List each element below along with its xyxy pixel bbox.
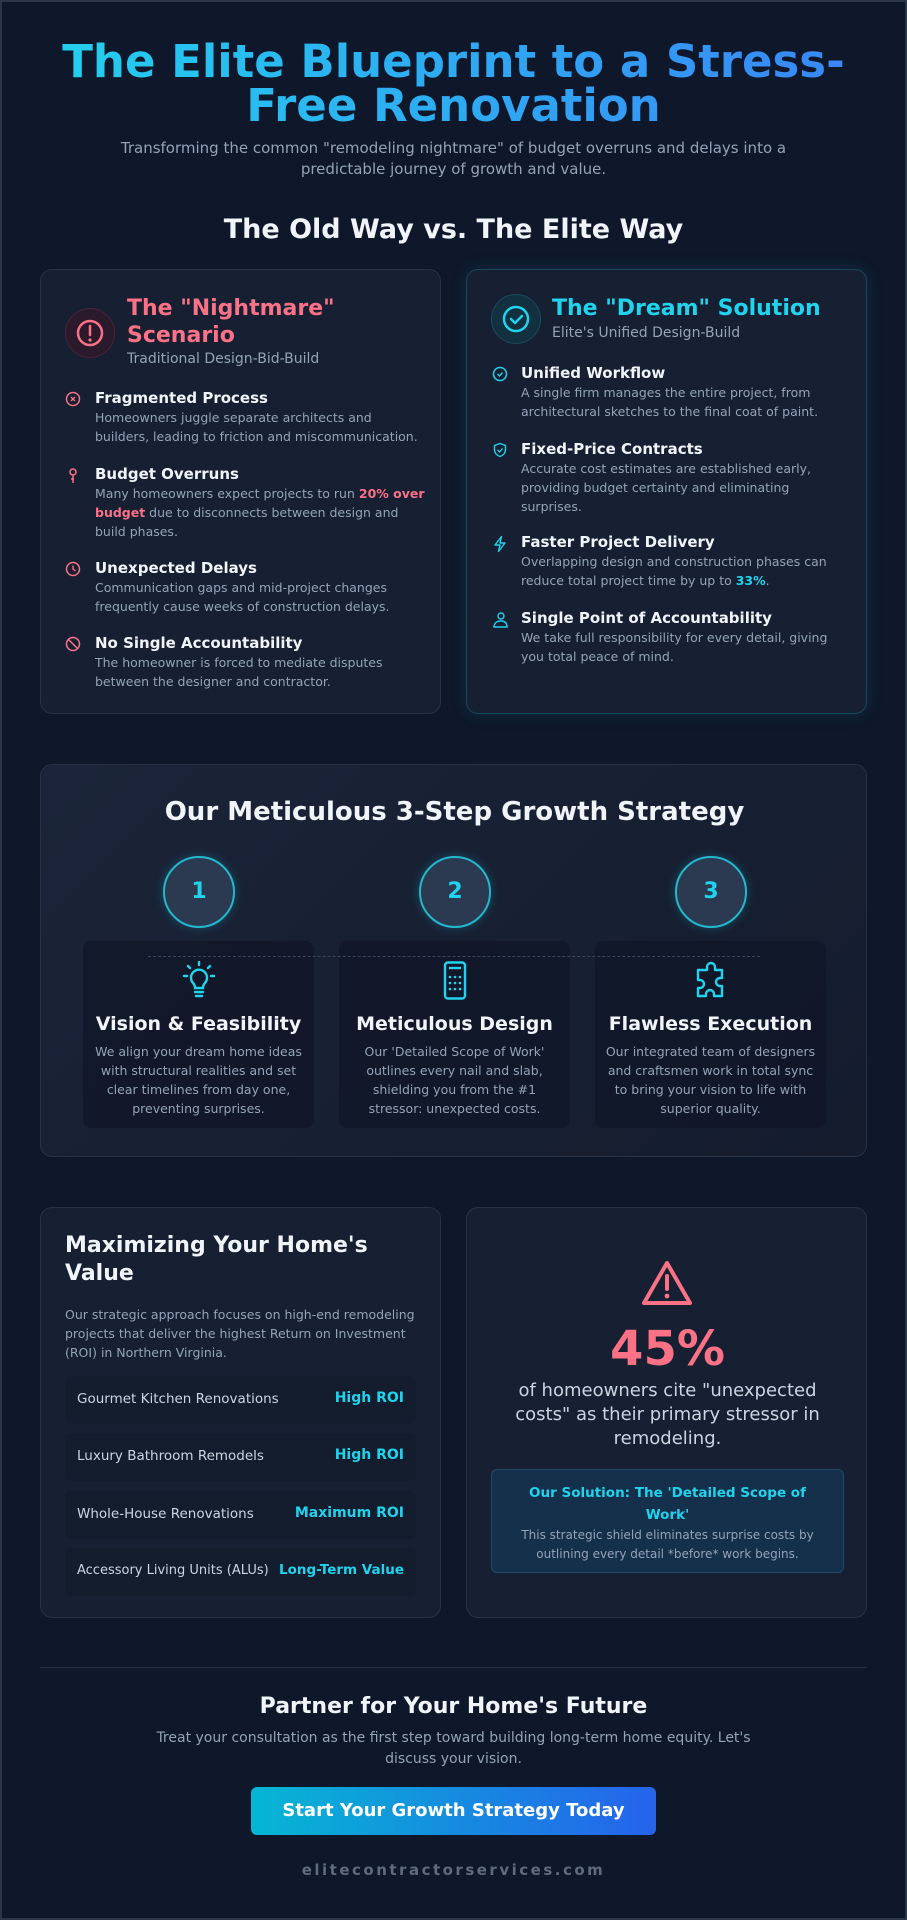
roi row: bathroom: Luxury Bathroom Remodels: [77, 1448, 264, 1464]
panel: dream: Fixed-Price Contracts: [521, 440, 703, 458]
callout: solution: This strategic shield eliminates surprise costs by outlining every detail *before* work begins.: [521, 1528, 814, 1561]
item: faster: [494, 533, 827, 588]
item: unified: [492, 364, 818, 419]
button: CTA: Start Your Growth Strategy Today: [282, 1800, 625, 1821]
heading: Value: [65, 1261, 134, 1286]
panel: nightmare: No Single Accountability: [95, 634, 302, 652]
heading: [127, 296, 335, 348]
paragraph: partner: Treat your consultation as the first step toward building long-term home equity. Let's discuss your vision.: [156, 1730, 751, 1767]
panel: nightmare: [40, 269, 441, 714]
panel: nightmare: Unexpected Delays: [95, 559, 257, 577]
panel: nightmare: Communication gaps and mid-project changes frequently cause weeks of construction delays.: [95, 580, 390, 614]
step 1: [83, 852, 314, 1128]
panel: 3-step strategy: [40, 764, 867, 1157]
heading: Maximizing Your Home's: [65, 1233, 368, 1258]
panel: nightmare: Fragmented Process: [95, 389, 268, 407]
title: Free Renovation: [246, 79, 661, 132]
icon: lightbulb: [182, 961, 216, 998]
roi row: whole house: Maximum ROI: [295, 1505, 404, 1521]
roi row: ALUs: Long-Term Value: [279, 1562, 404, 1578]
stat number: 45%: [610, 1321, 725, 1377]
subheading: Traditional Design-Bid-Build: [127, 351, 319, 367]
panel: nightmare: The homeowner is forced to mediate disputes between the designer and contractor.: [95, 655, 382, 689]
panel: dream: Single Point of Accountability: [521, 609, 772, 627]
icon: alert circle: [65, 308, 115, 358]
subtitle: Transforming the common "remodeling nightmare" of budget overruns and delays into a predictable journey of growth and value.: [121, 139, 786, 178]
step card: [83, 941, 314, 1128]
subheading: Elite's Unified Design-Build: [552, 325, 740, 341]
number circle 2: [419, 856, 491, 928]
button: CTA: [251, 1787, 656, 1835]
step 3: [600, 852, 815, 1116]
footer url: elitecontractorservices.com: [302, 1861, 605, 1879]
step 2: [339, 852, 570, 1128]
panel: nightmare: builders, leading to friction and miscommunication.: [95, 429, 418, 444]
panel: dream: Unified Workflow: [521, 364, 665, 382]
item: fragmented: [66, 389, 418, 444]
number circle 1: [163, 856, 235, 928]
paragraph: Our strategic approach focuses on high-end remodeling projects that deliver the highest Return on Investment (ROI) in Northern Virginia.: [65, 1307, 415, 1360]
roi row: bathroom: [65, 1433, 416, 1481]
title: Vision & Feasibility: [96, 1013, 301, 1035]
roi row: kitchen: High ROI: [335, 1390, 404, 1406]
panel: nightmare: Many homeowners expect projects to run 20% over budget due to disconnects between design and build phases.: [95, 486, 425, 539]
title: [0, 40, 907, 128]
panel: maximizing value: [40, 1207, 441, 1618]
step card: [339, 941, 570, 1128]
roi row: bathroom: High ROI: [335, 1447, 404, 1463]
roi row: kitchen: [65, 1376, 416, 1424]
stat text: of homeowners cite "unexpected costs" as their primary stressor in remodeling.: [515, 1380, 820, 1449]
callout: solution: Our Solution: The 'Detailed Scope of Work': [529, 1485, 806, 1523]
desc: We align your dream home ideas with structural realities and set clear timelines from day one, preventing surprises.: [95, 1044, 302, 1116]
panel: dream: Faster Project Delivery: [521, 533, 715, 551]
heading: partner: Partner for Your Home's Future: [260, 1694, 647, 1719]
panel: nightmare: Homeowners juggle separate architects and: [95, 410, 372, 425]
number circle 1: 1: [191, 879, 207, 904]
heading: old vs elite: The Old Way vs. The Elite Way: [224, 214, 683, 245]
panel: dream: Accurate cost estimates are established early, providing budget certainty and eliminating surprises.: [521, 461, 811, 514]
item: fixed price: [494, 440, 811, 514]
roi row: kitchen: Gourmet Kitchen Renovations: [77, 1391, 279, 1407]
callout: solution: [491, 1469, 844, 1573]
number circle 3: 3: [703, 879, 719, 904]
item: budget: [69, 465, 425, 539]
icon: check circle: [491, 294, 541, 344]
title: Flawless Execution: [609, 1013, 812, 1035]
desc: Our integrated team of designers and craftsmen work in total sync to bring your vision to life with superior quality.: [606, 1044, 815, 1116]
roi row: whole house: [65, 1491, 416, 1539]
panel: 45% stat: [466, 1207, 867, 1618]
desc: Our 'Detailed Scope of Work' outlines every nail and slab, shielding you from the #1 stressor: unexpected costs.: [365, 1044, 544, 1116]
roi row: whole house: Whole-House Renovations: [77, 1506, 254, 1522]
heading: Our Meticulous 3-Step Growth Strategy: [165, 797, 744, 827]
panel: dream: [466, 269, 867, 714]
number circle 2: 2: [447, 879, 463, 904]
item: single point: [493, 609, 827, 664]
panel: dream: A single firm manages the entire project, from architectural sketches to the final coat of paint.: [521, 385, 818, 419]
icon: puzzle: [696, 962, 724, 998]
heading: The "Nightmare": [127, 296, 335, 321]
item: accountability: [66, 634, 382, 689]
icon: warning triangle: [642, 1260, 692, 1305]
heading: [65, 1233, 368, 1286]
panel: dream: Overlapping design and construction phases can reduce total project time by up to 33%.: [521, 554, 827, 588]
step card: [595, 941, 826, 1128]
roi row: ALUs: [65, 1548, 416, 1596]
panel: dream: We take full responsibility for every detail, giving you total peace of mind.: [521, 630, 827, 664]
panel: nightmare: Budget Overruns: [95, 465, 239, 483]
title: Meticulous Design: [356, 1013, 553, 1035]
number circle 3: [675, 856, 747, 928]
title: The Elite Blueprint to a Stress-: [62, 35, 845, 88]
heading: The "Dream" Solution: [552, 296, 821, 321]
item: delays: [66, 559, 390, 614]
icon: calculator: [444, 961, 466, 1000]
heading: Scenario: [127, 323, 235, 348]
roi row: ALUs: Accessory Living Units (ALUs): [77, 1563, 269, 1578]
